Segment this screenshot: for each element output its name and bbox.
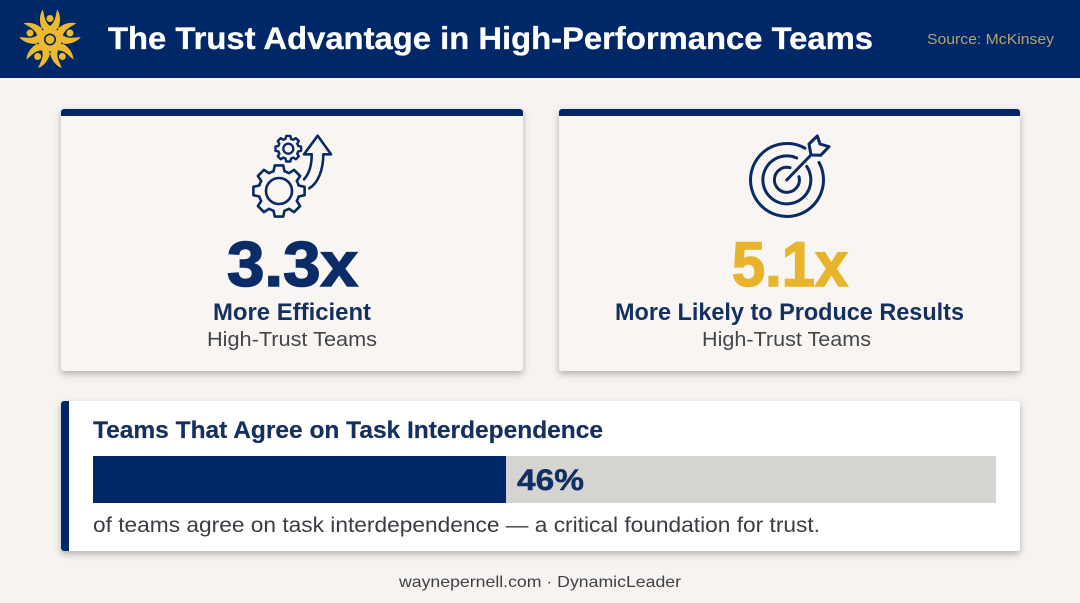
icon: gold sunburst logo of five figures bbox=[18, 10, 82, 70]
value 46%: 46% bbox=[517, 464, 584, 497]
label: more likely to produce results: More Likely to Produce Results bbox=[615, 299, 964, 326]
sublabel: high-trust teams: High-Trust Teams bbox=[207, 329, 377, 351]
progress bar at 46% bbox=[93, 456, 996, 503]
title: The Trust Advantage in High-Performance Teams bbox=[108, 20, 873, 56]
panel: task interdependence bbox=[61, 401, 1020, 551]
source label: Source: McKinsey bbox=[927, 31, 1055, 48]
icon: gears with upward arrow bbox=[253, 136, 331, 217]
big number 3.3x: 3.3x bbox=[227, 230, 358, 300]
panel: results stat bbox=[559, 109, 1020, 371]
sublabel: high-trust teams: High-Trust Teams bbox=[702, 329, 871, 351]
panel: efficiency stat bbox=[61, 109, 523, 371]
label: more efficient: More Efficient bbox=[213, 299, 371, 326]
icon: target with arrow bbox=[750, 136, 829, 216]
panel heading: Teams That Agree on Task Interdependence bbox=[93, 417, 603, 444]
footer credit: waynepernell.com · DynamicLeader bbox=[398, 574, 682, 591]
big number 5.1x: 5.1x bbox=[732, 230, 848, 300]
caption: of teams agree on task interdependence — a critical foundation for trust. bbox=[93, 514, 820, 537]
header band bbox=[0, 0, 1080, 78]
